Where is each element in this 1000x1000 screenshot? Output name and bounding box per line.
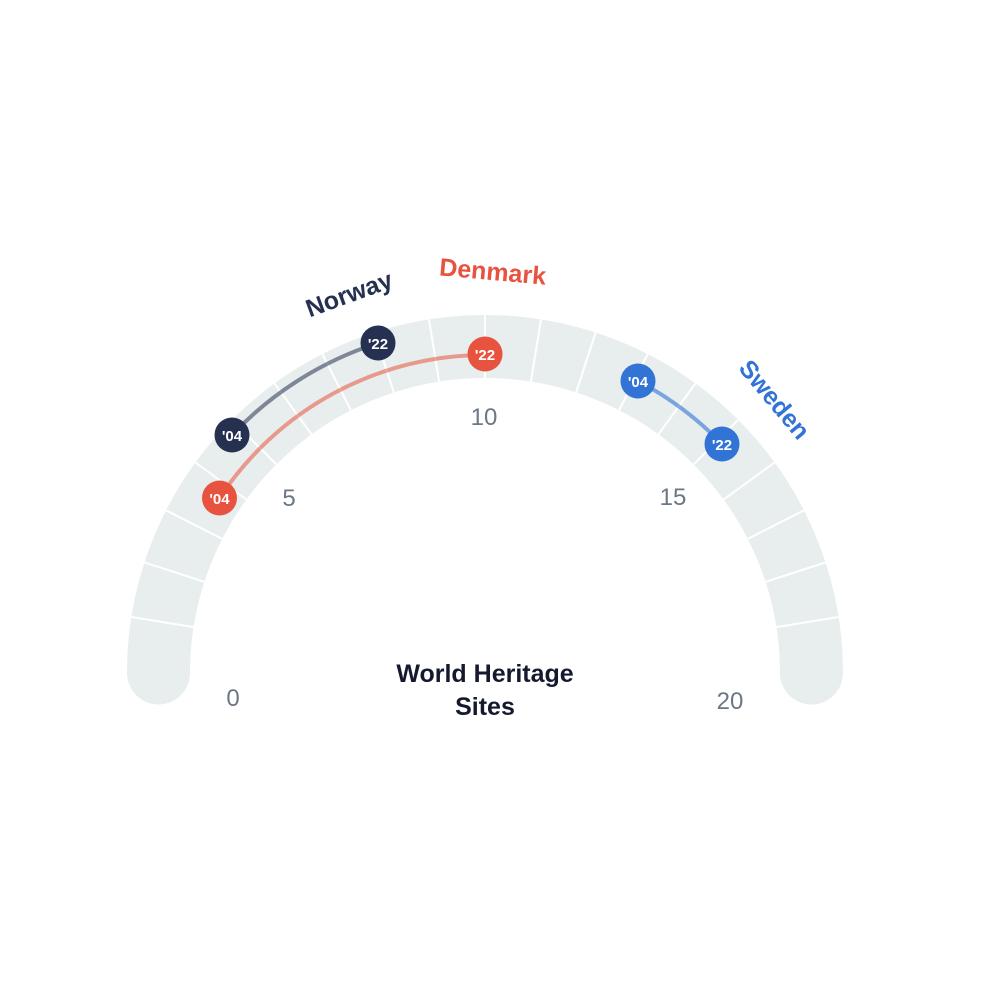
center title: World Heritage — [396, 660, 574, 688]
series: Norway: '04 — [222, 428, 243, 445]
center title: Sites — [455, 693, 515, 721]
tick labels — [226, 404, 743, 715]
series: Sweden: Sweden — [733, 355, 815, 445]
series: Norway: Norway — [302, 266, 397, 323]
series: Sweden — [620, 355, 815, 462]
tick labels: 0 — [226, 685, 240, 712]
gauge band — [131, 315, 839, 673]
series: Denmark: '04 — [209, 491, 230, 508]
series: Denmark: '22 — [475, 347, 495, 364]
series: Norway: '22 — [368, 336, 388, 353]
series: Denmark: Denmark — [438, 253, 547, 291]
series: Sweden: '22 — [712, 437, 732, 454]
tick labels: 15 — [660, 484, 686, 511]
center title — [396, 660, 574, 721]
tick labels: 10 — [471, 404, 497, 431]
tick labels: 5 — [282, 485, 296, 512]
tick labels: 20 — [717, 688, 743, 715]
series: Sweden: '04 — [628, 374, 649, 391]
series: Norway — [214, 266, 397, 452]
series: Denmark — [202, 253, 547, 515]
